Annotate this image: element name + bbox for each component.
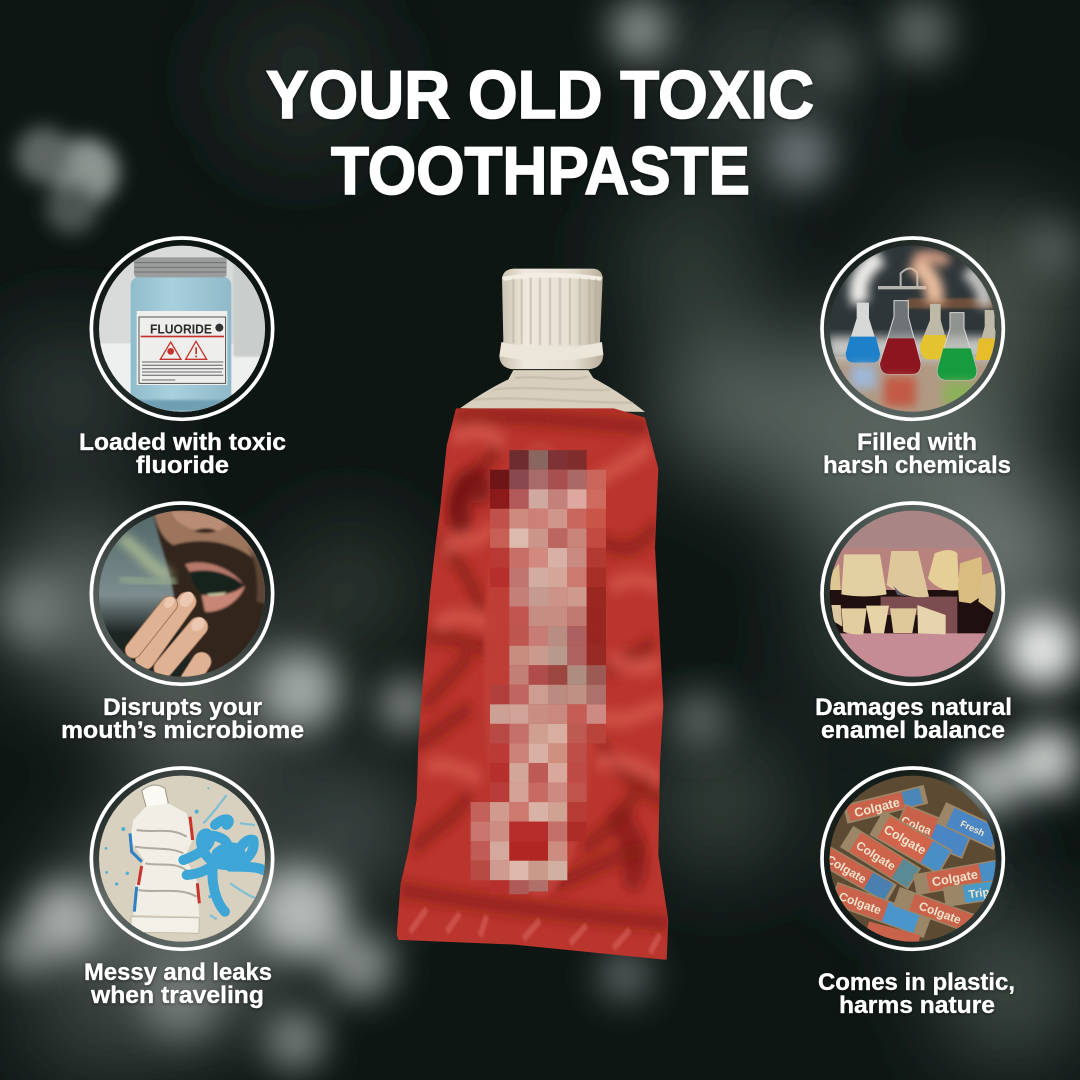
icon: pile of discarded tubes: Colgate bbox=[881, 822, 928, 858]
caption: Messy and leaks bbox=[84, 959, 272, 986]
tube body bbox=[393, 404, 673, 967]
icon: pile of discarded tubes: Colgate bbox=[854, 838, 899, 874]
icon: fluoride jar bbox=[91, 238, 273, 419]
caption: Comes in plastic, bbox=[818, 969, 1015, 996]
icon: pile of discarded tubes bbox=[820, 768, 1005, 951]
panel: loaded with toxic fluoride bbox=[79, 238, 286, 479]
caption: Disrupts your bbox=[103, 694, 262, 721]
panel: plastic harms nature bbox=[818, 768, 1015, 1019]
icon: pile of discarded tubes: Colgate bbox=[931, 868, 979, 889]
caption: Loaded with toxic bbox=[79, 429, 286, 456]
caption bbox=[84, 959, 272, 1009]
central toothpaste tube with pixelated logo bbox=[393, 269, 673, 967]
title: TOOTHPASTE bbox=[331, 133, 750, 209]
caption: harms nature bbox=[839, 992, 995, 1019]
icon: laboratory flasks bbox=[822, 238, 1003, 419]
caption: Filled with bbox=[857, 429, 977, 456]
icon: pile of discarded tubes: Colgate bbox=[853, 795, 901, 820]
caption bbox=[61, 694, 304, 744]
icon: burst tube with blue paste bbox=[91, 768, 273, 949]
caption: when traveling bbox=[90, 982, 264, 1009]
panel: messy and leaks bbox=[84, 768, 273, 1009]
tube cap bbox=[499, 269, 603, 369]
icon: pile of discarded tubes: Colgate bbox=[917, 899, 963, 927]
caption: enamel balance bbox=[821, 717, 1005, 744]
icon: pile of discarded tubes: Colgate bbox=[837, 889, 883, 917]
panel: damages enamel bbox=[815, 503, 1012, 744]
panel: harsh chemicals bbox=[822, 238, 1011, 479]
title bbox=[266, 57, 814, 209]
caption: mouth’s microbiome bbox=[61, 717, 304, 744]
pixelated censored logo bbox=[471, 450, 606, 894]
icon: damaged teeth bbox=[822, 503, 1003, 684]
caption bbox=[79, 429, 286, 479]
title: YOUR OLD TOXIC bbox=[266, 57, 814, 133]
caption bbox=[823, 429, 1011, 479]
icon: mouth and hand bbox=[91, 503, 273, 684]
tube shoulder bbox=[460, 370, 645, 412]
icon: pile of discarded tubes: Colgate bbox=[824, 852, 869, 886]
panel: disrupts microbiome bbox=[61, 503, 304, 744]
icon: pile of discarded tubes: Colga bbox=[899, 815, 933, 838]
caption: Damages natural bbox=[815, 694, 1012, 721]
caption bbox=[818, 969, 1015, 1019]
caption: fluoride bbox=[136, 452, 229, 479]
flasks bbox=[846, 303, 880, 363]
caption: harsh chemicals bbox=[823, 452, 1011, 479]
caption bbox=[815, 694, 1012, 744]
icon: fluoride jar: FLUORIDE bbox=[150, 322, 212, 337]
icon: pile of discarded tubes: Fresh bbox=[959, 819, 986, 838]
icon: pile of discarded tubes: Tripo bbox=[968, 885, 997, 901]
